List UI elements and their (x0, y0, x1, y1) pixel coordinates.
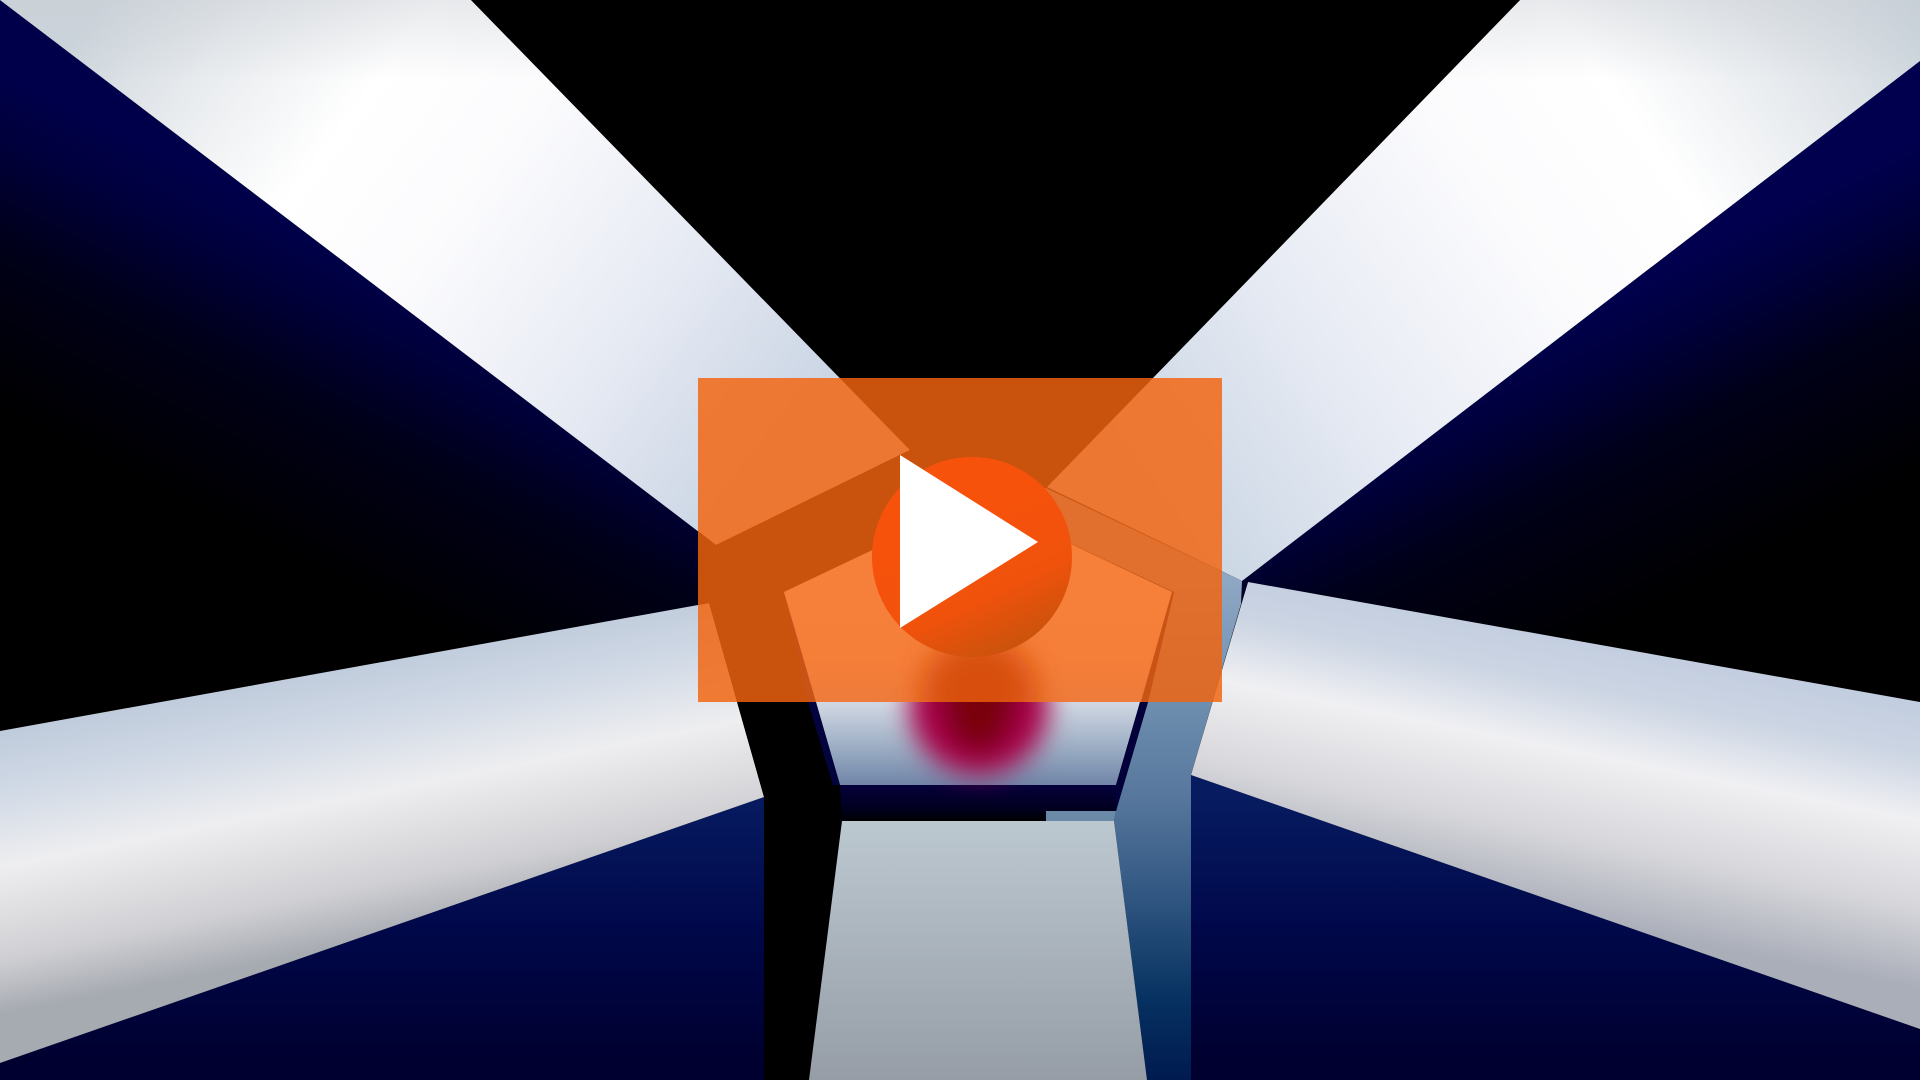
blue ledge piece (1046, 811, 1116, 821)
play button disc (872, 457, 1072, 657)
black frame left column (698, 450, 978, 1080)
navy strip left of window (784, 592, 840, 785)
sphere shadow through panel (910, 643, 1048, 702)
light beam lower left (0, 603, 764, 1063)
light beam upper left (0, 0, 910, 545)
light beam upper right (1047, 0, 1920, 581)
lower floor panel (809, 821, 1147, 1080)
black ceiling (471, 0, 1520, 500)
lit window (784, 500, 1172, 785)
light beam lower right (1191, 582, 1920, 1029)
navy panel upper right (1242, 61, 1920, 702)
dark lintel bar (840, 785, 1116, 821)
navy panel lower left (0, 797, 764, 1080)
navy panel upper left (0, 0, 716, 731)
play button panel (698, 378, 1222, 702)
window glow under overlay (784, 544, 1172, 702)
play triangle (900, 455, 1038, 628)
blurred red sphere (909, 635, 1049, 775)
navy strip right of window (1116, 592, 1174, 811)
dark notch at right corner (1241, 581, 1248, 604)
blue frame right column (978, 488, 1242, 1080)
navy panel lower right (1191, 775, 1920, 1080)
